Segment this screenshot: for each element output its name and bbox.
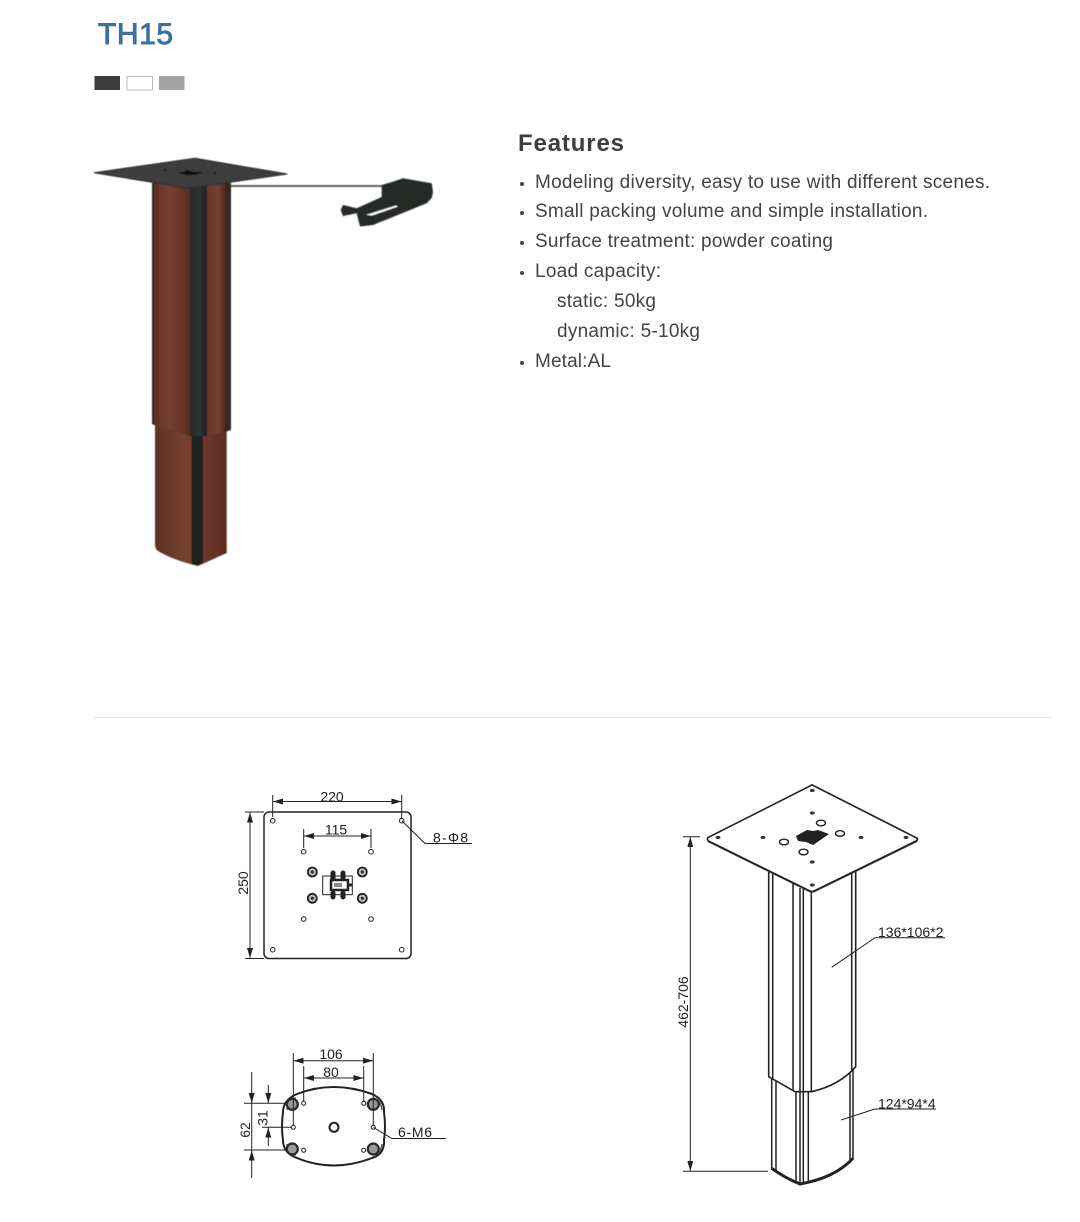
centre hole bbox=[330, 1123, 338, 1132]
technical drawing: top plate plan bbox=[235, 788, 472, 958]
feature list: static: 50kg bbox=[557, 291, 656, 312]
upper column bbox=[769, 871, 856, 1092]
dimension 462-706 bbox=[675, 837, 768, 1171]
section outline bbox=[282, 1087, 385, 1166]
lower column bbox=[772, 1064, 853, 1184]
dimension 106: 106 bbox=[319, 1046, 343, 1062]
technical drawing: column section bbox=[237, 1046, 446, 1178]
corner brackets bbox=[287, 1098, 382, 1155]
dimension 115 bbox=[304, 822, 371, 848]
callout 6-M6: 6-M6 bbox=[398, 1124, 432, 1140]
central bracket bbox=[308, 868, 367, 903]
features heading: Features bbox=[518, 130, 624, 157]
dimension 250: 250 bbox=[235, 871, 251, 895]
dimension 31 bbox=[254, 1085, 291, 1146]
feature list: Modeling diversity, easy to use with different scenes. bbox=[535, 172, 990, 193]
feature list: dynamic: 5-10kg bbox=[557, 321, 700, 342]
product photo: lifting table leg with wood finish bbox=[94, 158, 433, 566]
mounting plate bbox=[94, 158, 287, 188]
cable bbox=[231, 185, 382, 187]
feature list bbox=[520, 172, 990, 372]
mounting holes bbox=[270, 818, 404, 952]
hand controller bbox=[341, 178, 433, 226]
dimension 106 bbox=[293, 1046, 373, 1125]
callout 6-M6 bbox=[374, 1124, 446, 1140]
dimension 31: 31 bbox=[254, 1110, 270, 1126]
callout 124*94*4 bbox=[841, 1096, 936, 1120]
feature list: Metal:AL bbox=[535, 351, 611, 372]
colour swatches bbox=[94, 76, 184, 90]
dimension 62 bbox=[237, 1072, 285, 1178]
callout 8-Φ8 bbox=[402, 821, 472, 846]
feature list: Load capacity: bbox=[535, 261, 661, 282]
dimension 250 bbox=[235, 812, 264, 958]
top plate bbox=[707, 785, 917, 892]
callout 124*94*4: 124*94*4 bbox=[878, 1096, 936, 1112]
callout 8-Φ8: 8-Φ8 bbox=[433, 830, 468, 846]
dimension 62: 62 bbox=[237, 1122, 253, 1138]
title: TH15: TH15 bbox=[98, 18, 173, 51]
dimension 220: 220 bbox=[320, 788, 344, 804]
plate outline bbox=[264, 812, 411, 958]
technical drawing: isometric leg bbox=[675, 785, 945, 1184]
feature list: Small packing volume and simple installation. bbox=[535, 201, 928, 222]
dimension 115: 115 bbox=[325, 822, 347, 838]
dimension 80: 80 bbox=[323, 1064, 339, 1080]
upper column bbox=[152, 183, 231, 436]
dimension 220 bbox=[273, 788, 402, 818]
dimension 462-706: 462-706 bbox=[675, 976, 691, 1028]
callout 136*106*2: 136*106*2 bbox=[878, 924, 944, 940]
callout 136*106*2 bbox=[832, 924, 945, 967]
features panel bbox=[518, 130, 990, 372]
screw bosses bbox=[287, 1099, 379, 1154]
feature list: Surface treatment: powder coating bbox=[535, 231, 833, 252]
lower column bbox=[155, 425, 227, 566]
dimension 80 bbox=[304, 1064, 364, 1101]
